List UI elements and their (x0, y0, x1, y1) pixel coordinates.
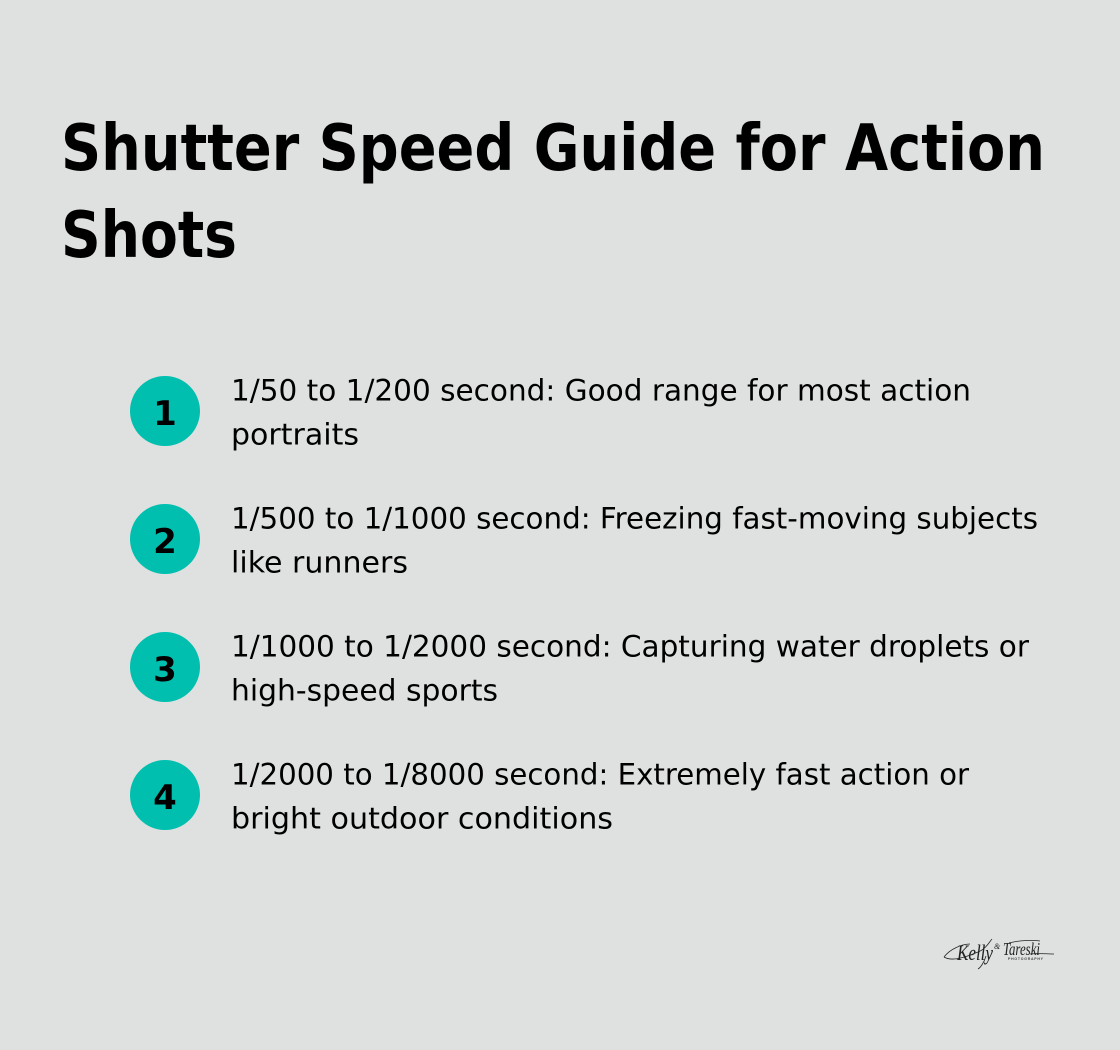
number badge 3 (130, 632, 200, 702)
item 1 text: 1/50 to 1/200 second: Good range for most action (231, 374, 971, 408)
list item 4 (130, 758, 969, 836)
logo: signature: & (994, 942, 1001, 951)
item 3 text: high-speed sports (231, 674, 498, 708)
item 3 text: 1/1000 to 1/2000 second: Capturing water droplets or (231, 630, 1029, 664)
logo: signature: Tareski (1003, 939, 1040, 959)
number badge 3: 3 (153, 650, 177, 690)
list item 2 (130, 502, 1038, 580)
title: Shots (61, 199, 237, 273)
number badge 2: 2 (153, 522, 177, 562)
number badge 1: 1 (153, 394, 177, 434)
logo: signature (944, 939, 1054, 969)
number badge 4: 4 (153, 778, 177, 818)
item 1 text: portraits (231, 418, 359, 452)
number badge 2 (130, 504, 200, 574)
item 4 text: 1/2000 to 1/8000 second: Extremely fast action or (231, 758, 969, 792)
list item 1 (130, 374, 971, 452)
item 2 text (231, 502, 1038, 580)
logo: signature: PHOTOGRAPHY (1008, 957, 1044, 961)
item 1 text (231, 374, 971, 452)
number badge 1 (130, 376, 200, 446)
logo: signature: Kelly (956, 940, 993, 965)
item 3 text (231, 630, 1029, 708)
item 2 text: like runners (231, 546, 408, 580)
title (61, 112, 1045, 273)
item 4 text (231, 758, 969, 836)
item 2 text: 1/500 to 1/1000 second: Freezing fast-moving subjects (231, 502, 1038, 536)
number badge 4 (130, 760, 200, 830)
list item 3 (130, 630, 1029, 708)
item 4 text: bright outdoor conditions (231, 802, 613, 836)
